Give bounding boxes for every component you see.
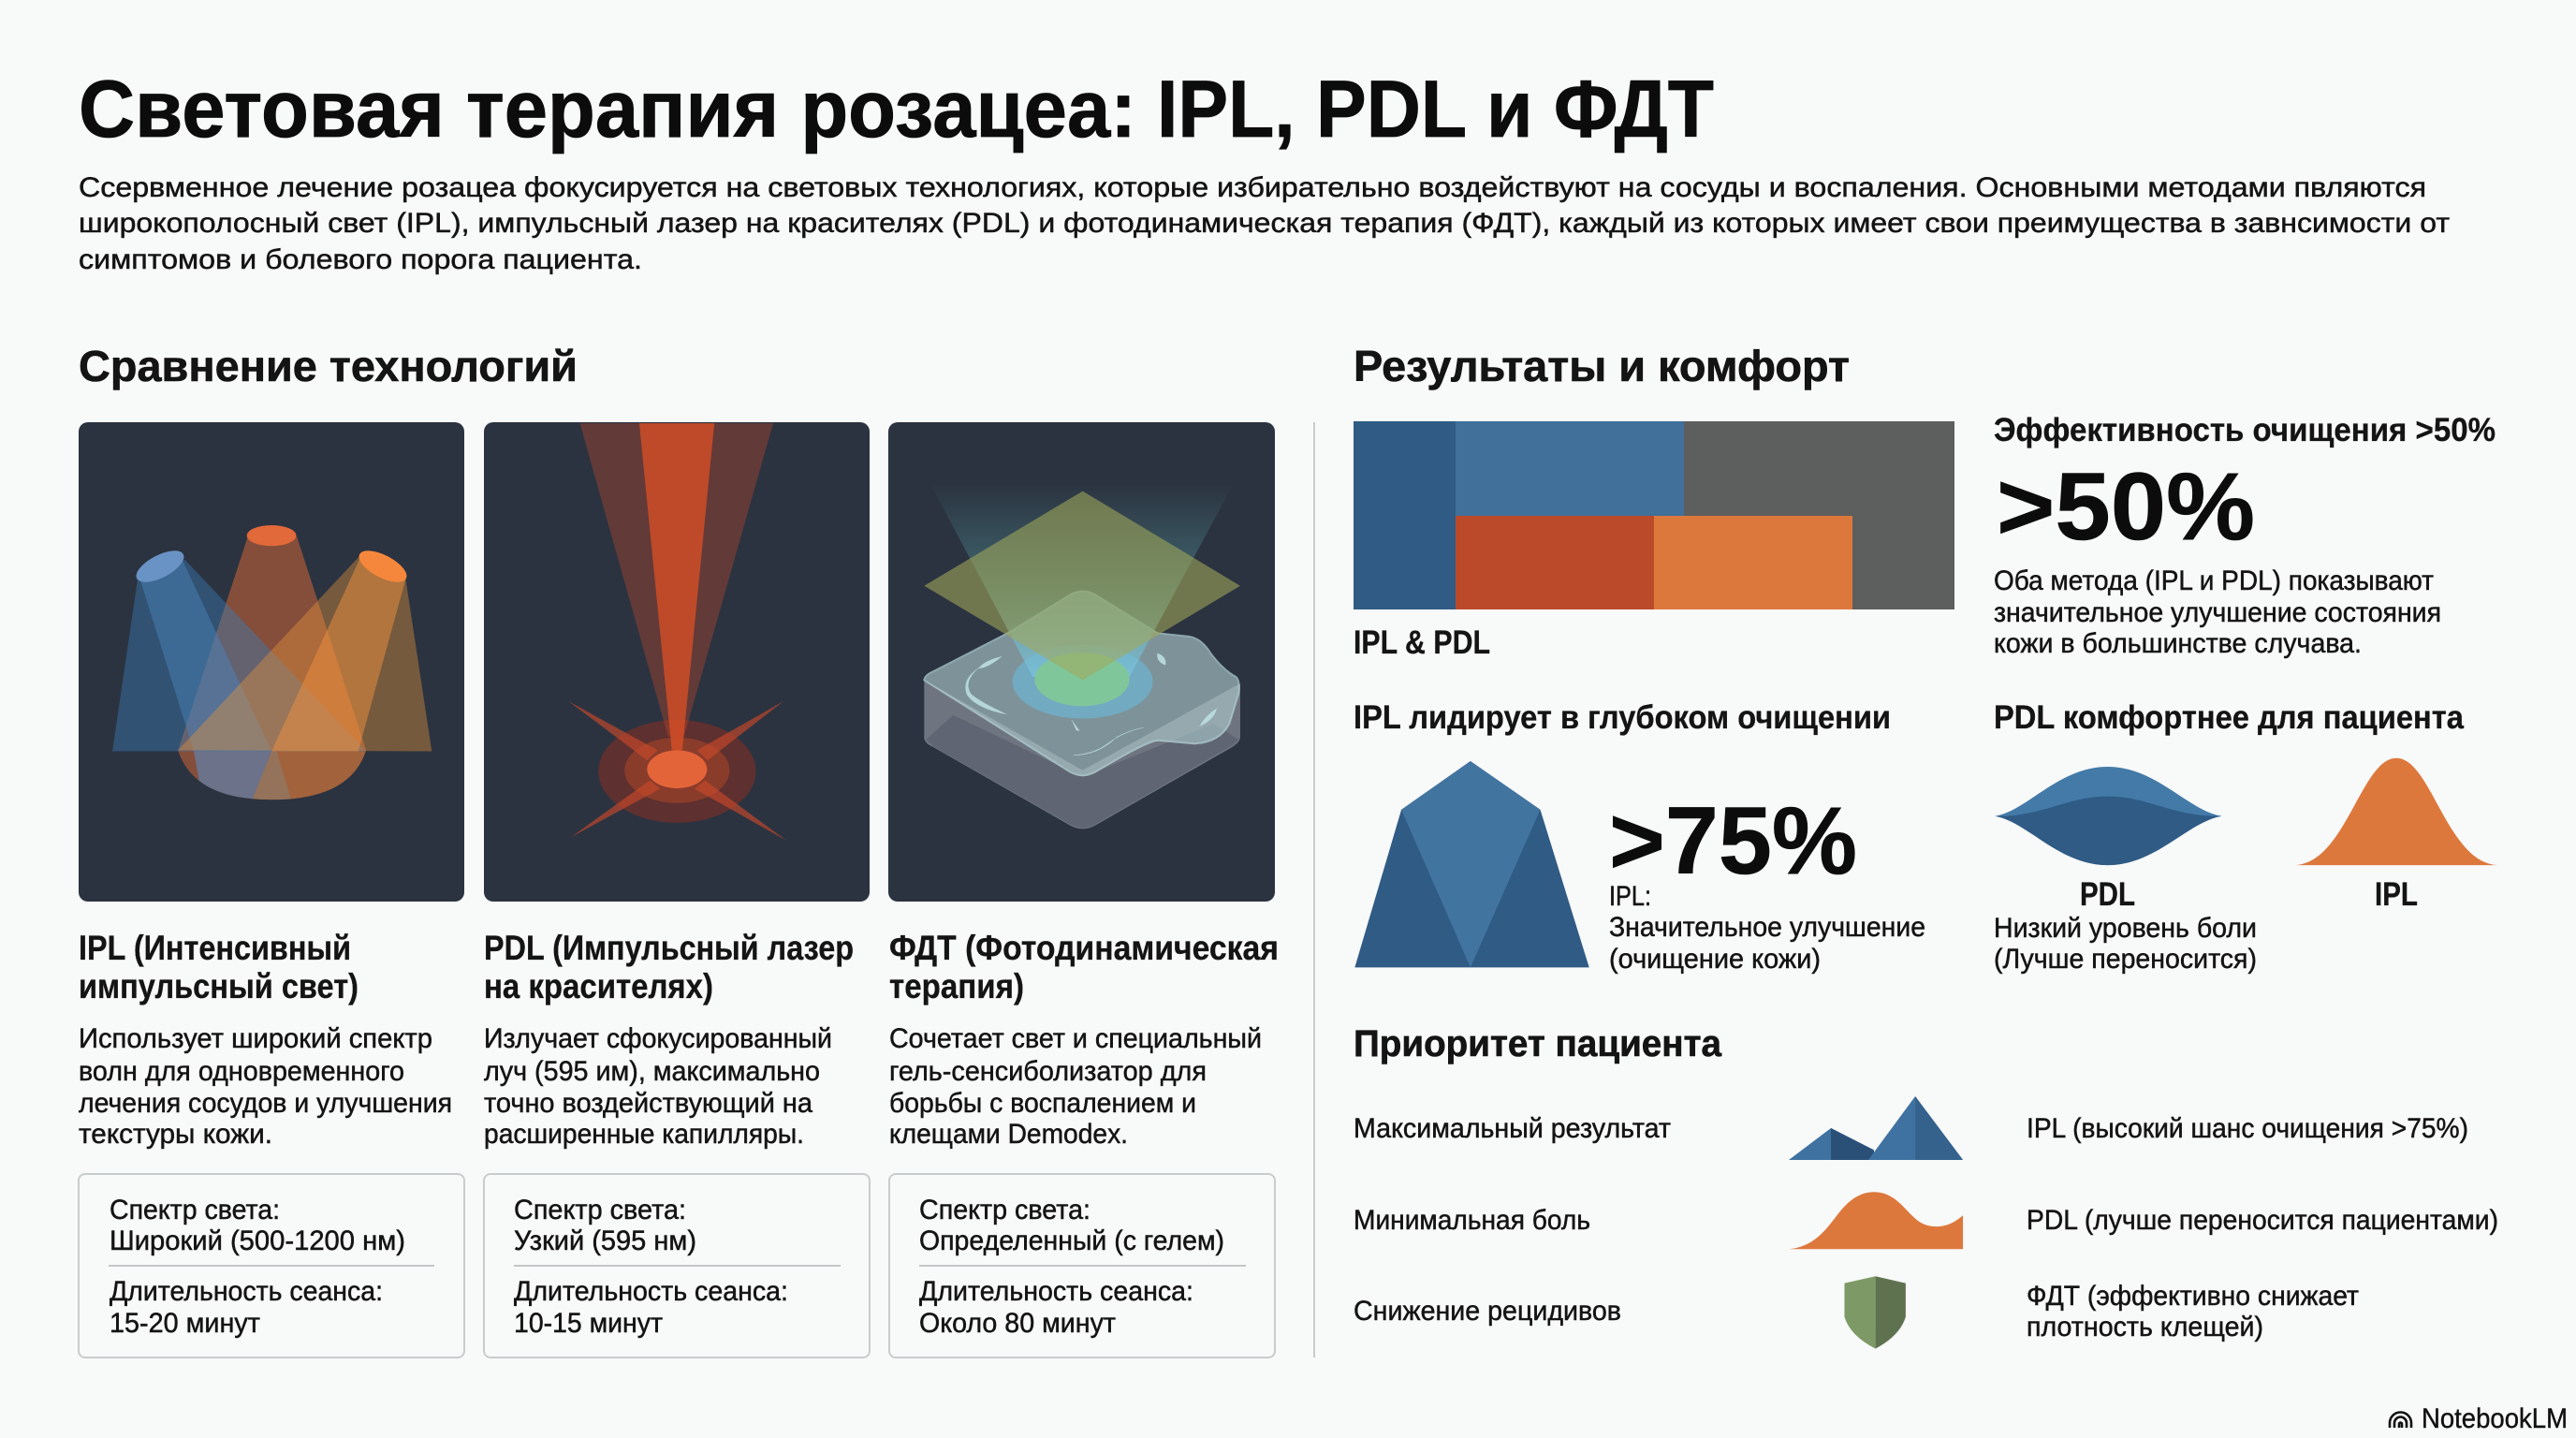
card: PDL heading: на красителях)	[484, 967, 713, 1005]
priority row: fewer relapses: Снижение рецидивов	[1354, 1296, 1621, 1327]
intro text block: симптомов и болевого порога пациента.	[79, 244, 642, 275]
text: PDL pain note: (Лучше переносится)	[1994, 944, 2257, 975]
spec box: PDL: 10-15 минут	[514, 1308, 663, 1339]
card: PDL description: луч (595 им), максимально	[484, 1056, 820, 1087]
icon: PDL pain curve	[1995, 767, 2221, 865]
card: PDT description	[889, 1023, 1262, 1150]
card: PDL description	[484, 1023, 832, 1150]
card: PDL description: Излучает сфокусированный	[484, 1023, 832, 1054]
card: PDL heading: PDL (Импульсный лазер	[484, 929, 854, 967]
priority row: maximum result	[1354, 1096, 2468, 1160]
text: PDL pain note	[1994, 913, 2257, 975]
card: PDT heading: терапия)	[889, 967, 1024, 1005]
text: PDL pain note: Низкий уровень боли	[1994, 913, 2257, 944]
intro text block: Ссервменное лечение розацеа фокусируется на световых технологиях, которые избирательно воздействуют на сосуды и воспаления. Основными методами пвляются	[79, 172, 2426, 203]
spec box: IPL: 15-20 минут	[110, 1308, 260, 1339]
panel: PDL illustration	[484, 422, 870, 902]
icon: IPL pain curve	[2295, 758, 2497, 865]
text: IPL clearance note: Значительное улучшение	[1609, 912, 1925, 943]
card: IPL description: текстуры кожи.	[79, 1119, 272, 1150]
card: PDL description: расширенные капилляры.	[484, 1119, 804, 1150]
card: PDL heading	[484, 929, 854, 1005]
spec box: PDL	[484, 1174, 870, 1357]
spec box: PDT: Около 80 минут	[919, 1308, 1116, 1339]
text: efficacy description	[1994, 565, 2441, 659]
spec box: PDL: Длительность сеанса:	[514, 1276, 788, 1307]
heading: PDL comfort: PDL комфортнее для пациента	[1994, 699, 2464, 736]
card: IPL description	[79, 1023, 452, 1150]
spec box: PDT	[889, 1174, 1275, 1357]
card: IPL description: Использует широкий спектр	[79, 1023, 432, 1054]
text: efficacy description: кожи в большинстве случава.	[1994, 628, 2362, 659]
heading: IPL leads: IPL лидирует в глубоком очищении	[1354, 699, 1891, 736]
card: PDT description: клещами Demodex.	[889, 1119, 1128, 1150]
priority row: fewer relapses: плотность клещей)	[2027, 1312, 2263, 1343]
spec box: PDT: Определенный (с гелем)	[919, 1225, 1224, 1256]
chart: IPL and PDL efficacy blocks	[1354, 421, 1954, 609]
card: IPL heading: импульсный свет)	[79, 967, 359, 1005]
priority row: maximum result: Максимальный результат	[1354, 1113, 1671, 1144]
spec box: IPL	[79, 1174, 464, 1357]
intro text block	[79, 172, 2450, 275]
intro text block: широкополосный свет (IPL), импульсный лазер на красителях (PDL) и фотодинамическая терапия (ФДТ), каждый из которых имеет свои преимущества в завнсимости от	[79, 208, 2450, 239]
title: Световая терапия розацеа:	[79, 65, 1136, 154]
text: IPL clearance note: (очищение кожи)	[1609, 944, 1821, 975]
text: efficacy description: Оба метода (IPL и PDL) показывают	[1994, 565, 2434, 596]
heading: patient priority: Приоритет пациента	[1354, 1023, 1722, 1064]
priority row: fewer relapses	[1354, 1276, 2359, 1349]
stat: over 75 percent: >75%	[1609, 787, 1857, 894]
panel: PDT illustration	[888, 422, 1275, 902]
card: IPL description: волн для одновременного	[79, 1056, 404, 1087]
card: PDT heading: ФДТ (Фотодинамическая	[889, 929, 1279, 967]
spec box: PDT: Спектр света:	[919, 1195, 1090, 1225]
card: PDL description: точно воздействующий на	[484, 1088, 812, 1119]
card: PDT description: гель-сенсиболизатор для	[889, 1056, 1207, 1087]
text: efficacy description: значительное улучшение состояния	[1994, 597, 2441, 628]
panel: IPL illustration	[79, 422, 464, 902]
title	[79, 65, 1714, 154]
icon: IPL peak shape	[1354, 761, 1589, 967]
spec box: IPL: Длительность сеанса:	[110, 1276, 383, 1307]
spec box: IPL: Широкий (500-1200 нм)	[110, 1225, 405, 1256]
card: IPL heading	[79, 929, 359, 1005]
spec box: PDT: Длительность сеанса:	[919, 1276, 1193, 1307]
card: PDT description: Сочетает свет и специальный	[889, 1023, 1262, 1054]
spec box: PDL: Спектр света:	[514, 1195, 686, 1225]
spec box: IPL: Спектр света:	[110, 1195, 280, 1225]
card: IPL description: лечения сосудов и улучшения	[79, 1088, 452, 1119]
priority row: minimum pain: Минимальная боль	[1354, 1205, 1590, 1236]
title: IPL, PDL и ФДТ	[1157, 65, 1714, 154]
chart label: IPL & PDL	[1354, 624, 1490, 661]
label: IPL: IPL	[2375, 876, 2418, 913]
priority row: minimum pain: PDL (лучше переносится пациентами)	[2027, 1205, 2498, 1236]
heading: clearance efficacy: Эффективность очищения >50%	[1994, 412, 2496, 448]
stat: over 50 percent: >50%	[1997, 453, 2255, 560]
priority row: fewer relapses: ФДТ (эффективно снижает	[2027, 1281, 2359, 1312]
text: IPL clearance note	[1609, 881, 1925, 975]
heading: results and comfort: Результаты и комфорт	[1354, 342, 1850, 390]
card: PDT heading	[889, 929, 1279, 1005]
spec box: PDL: Узкий (595 нм)	[514, 1225, 696, 1256]
card: PDT description: борьбы с воспалением и	[889, 1088, 1196, 1119]
priority row: minimum pain	[1354, 1192, 2498, 1249]
priority row: maximum result: IPL (высокий шанс очищения >75%)	[2027, 1113, 2468, 1144]
card: IPL heading: IPL (Интенсивный	[79, 929, 351, 967]
heading: technology comparison: Сравнение технологий	[79, 342, 578, 390]
label: PDL: PDL	[2080, 876, 2135, 913]
text: IPL clearance note: IPL:	[1609, 881, 1651, 912]
